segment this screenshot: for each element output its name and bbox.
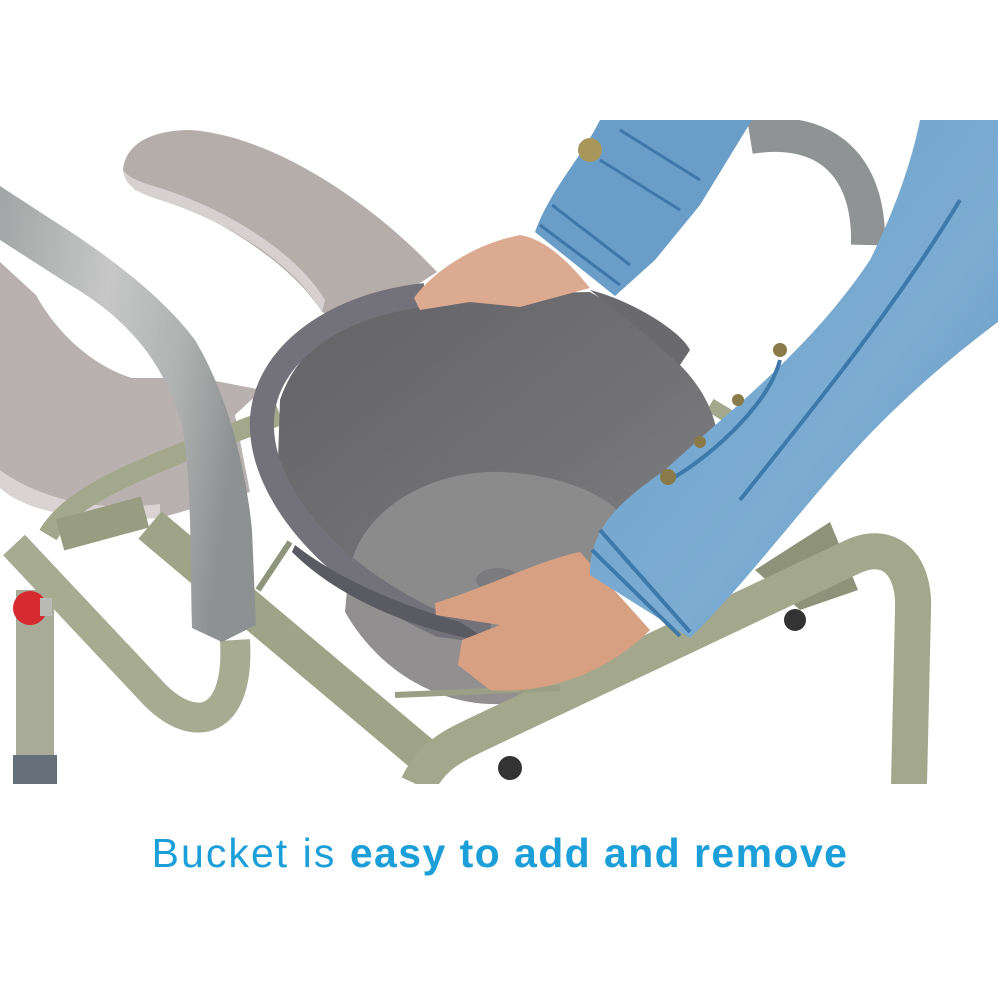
near hand: [435, 552, 650, 691]
far sleeve: [535, 120, 752, 296]
product photo: commode chair with bucket: [0, 120, 998, 784]
rear frame brace: [755, 522, 858, 610]
front armrest: [0, 186, 256, 642]
seat: [0, 130, 437, 519]
foot and pin: [13, 755, 57, 784]
back rail: [750, 135, 868, 245]
green frame: [14, 405, 735, 785]
near sleeve: [590, 120, 998, 638]
far hand: [414, 235, 590, 310]
bucket: [262, 290, 718, 704]
caption: Bucket is easy to add and remove: [152, 830, 848, 876]
front seat rail: [418, 551, 913, 785]
